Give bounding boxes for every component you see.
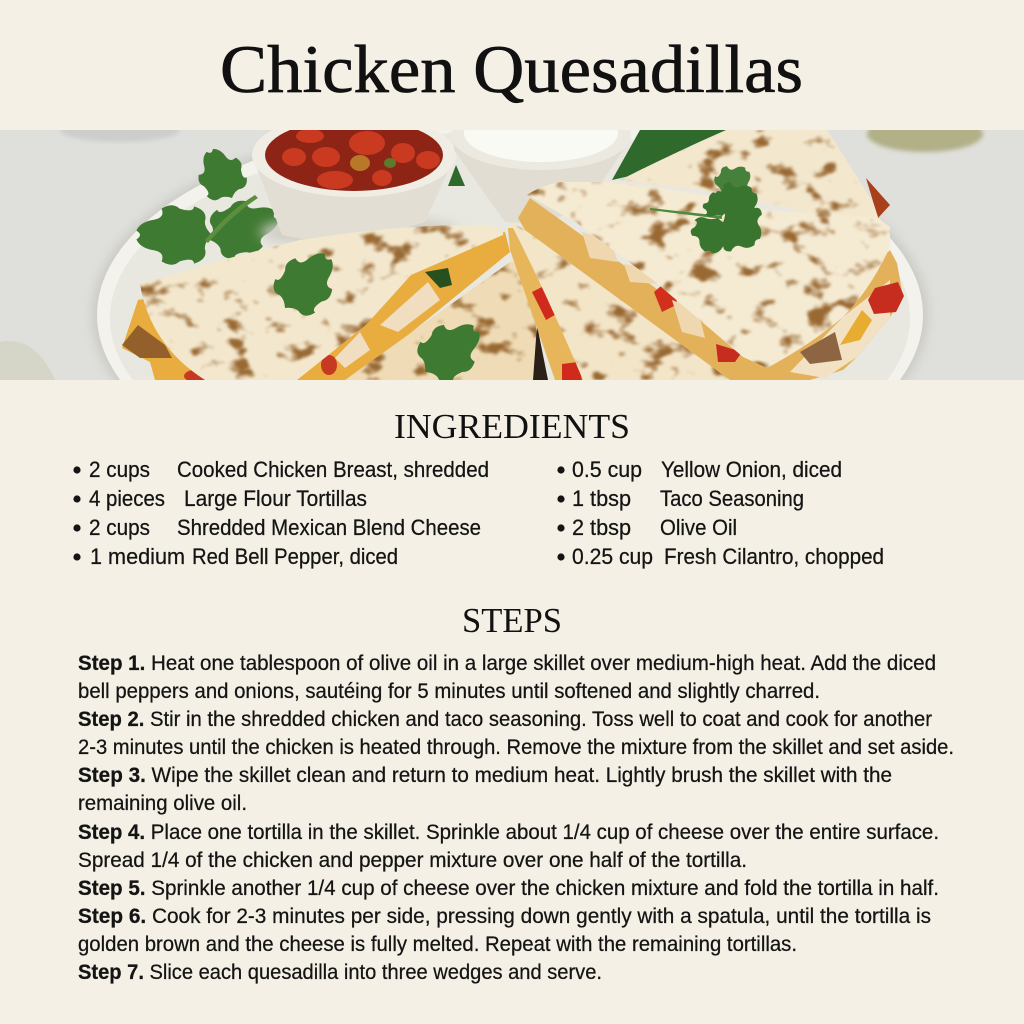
ingredients list: right column <box>557 457 884 569</box>
ingredients list: left column: 4 pieces <box>89 486 165 511</box>
steps text block: Step 2. Stir in the shredded chicken and taco seasoning. Toss well to coat and cook for another <box>78 708 932 731</box>
cilantro bunch <box>136 149 278 265</box>
plate <box>90 130 930 380</box>
ingredients list: right column: 0.25 cup <box>572 544 653 569</box>
steps text block: Step 5. Sprinkle another 1/4 cup of cheese over the chicken mixture and fold the tortilla in half. <box>78 877 939 900</box>
steps text block: Step 6. Cook for 2-3 minutes per side, pressing down gently with a spatula, until the tortilla is <box>78 905 931 928</box>
ingredients list: right column: Taco Seasoning <box>660 486 804 511</box>
ingredients list: right column: Yellow Onion, diced <box>661 457 842 482</box>
ingredients list: right column: 1 tbsp <box>572 486 631 511</box>
herb garnish behind cups <box>448 130 726 186</box>
steps text block: golden brown and the cheese is fully melted. Repeat with the remaining tortillas. <box>78 933 797 956</box>
right quesadilla wedge <box>518 172 904 380</box>
ingredients list: right column: 2 tbsp <box>572 515 631 540</box>
photo: quesadillas on a plate <box>0 130 1024 380</box>
steps text block: Step 4. Place one tortilla in the skillet. Sprinkle about 1/4 cup of cheese over the entire surface. <box>78 821 939 844</box>
salsa cup <box>252 130 448 239</box>
heading: steps: STEPS <box>462 601 562 640</box>
steps text block: 2-3 minutes until the chicken is heated through. Remove the mixture from the skillet and set aside. <box>78 736 954 759</box>
ingredients list: right column: Olive Oil <box>660 515 737 540</box>
ingredients list: left column: Shredded Mexican Blend Cheese <box>177 515 481 540</box>
ingredients list: left column <box>73 457 489 569</box>
heading: ingredients: INGREDIENTS <box>394 407 630 446</box>
steps text block: Step 3. Wipe the skillet clean and return to medium heat. Lightly brush the skillet with the <box>78 764 892 787</box>
steps text block <box>78 652 954 984</box>
ingredients list: left column: 1 medium <box>90 544 185 569</box>
ingredients list: left column: 2 cups <box>89 515 150 540</box>
ingredients list: left column: Cooked Chicken Breast, shredded <box>177 457 489 482</box>
steps text block: Step 7. Slice each quesadilla into three wedges and serve. <box>78 961 602 984</box>
steps text block: remaining olive oil. <box>78 792 247 815</box>
ingredients list: left column: 2 cups <box>89 457 150 482</box>
title: Chicken Quesadillas <box>220 31 803 107</box>
ingredients list: left column: Red Bell Pepper, diced <box>192 544 398 569</box>
back quesadilla wedge <box>620 130 890 218</box>
ingredients list: right column: 0.5 cup <box>572 457 642 482</box>
middle quesadilla wedge <box>345 262 548 380</box>
left quesadilla wedge <box>122 220 515 383</box>
steps text block: bell peppers and onions, sautéing for 5 minutes until softened and slightly charred. <box>78 680 820 703</box>
shadow under cups <box>260 216 460 248</box>
ingredients list: right column: Fresh Cilantro, chopped <box>664 544 884 569</box>
sour cream cup <box>452 130 631 222</box>
steps text block: Spread 1/4 of the chicken and pepper mixture over one half of the tortilla. <box>78 849 747 872</box>
ingredients list: left column: Large Flour Tortillas <box>184 486 367 511</box>
center quesadilla wedge <box>505 220 735 380</box>
steps text block: Step 1. Heat one tablespoon of olive oil in a large skillet over medium-high heat. Add the diced <box>78 652 936 675</box>
